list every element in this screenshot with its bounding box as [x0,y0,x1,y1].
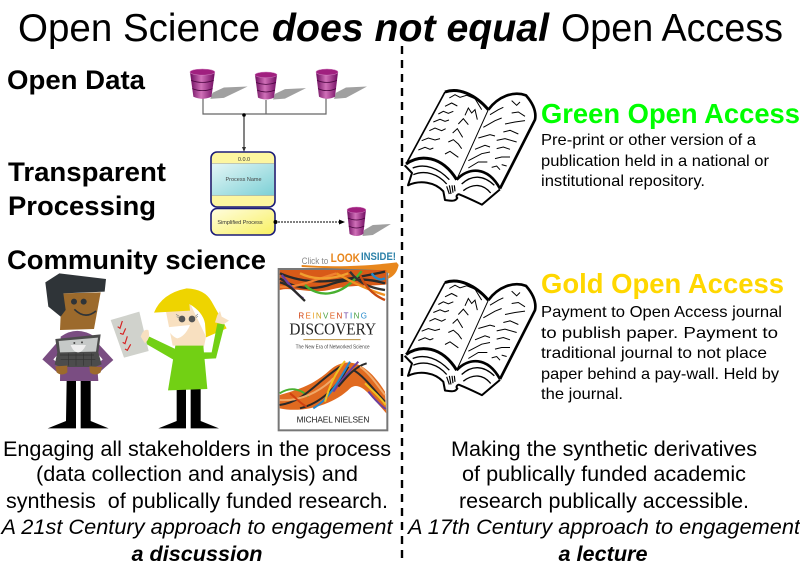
dotted arrow [274,220,345,224]
title: Open Access [561,7,783,50]
right caption: research publically accessible. [459,489,749,513]
look inside banner [302,251,399,279]
cover title: REINVENTING [298,312,367,321]
heading: open data: Open Data [7,65,146,95]
right caption: A 17th Century approach to engagement [406,515,800,539]
heading: transparent processing [8,157,166,221]
woman [111,288,229,428]
title [18,7,783,50]
connector lines [203,98,326,152]
left caption: (data collection and analysis) and [36,462,358,486]
illustration: two people [42,273,229,428]
look inside banner: INSIDE! [361,251,396,263]
process box: 0.0.0 [238,157,250,163]
book cover: Reinventing Discovery [279,251,399,430]
heading: transparent processing: Processing [8,191,156,221]
process box [211,152,275,207]
text: gold description: paper behind a pay-wall. Held by [541,366,779,383]
title: Open Science [18,7,260,50]
text: gold description: traditional journal to not place [541,345,767,362]
text: gold description: to publish paper. Payment to [541,325,778,342]
center divider [401,46,403,560]
text: green description: publication held in a national or [541,153,770,170]
process box: Process Name [225,177,262,183]
right caption: a lecture [558,542,648,566]
text: green description: Pre-print or other version of a [541,132,756,149]
text: green description [541,132,770,190]
cover author: MICHAEL NIELSEN [297,415,369,425]
output database icon [347,207,391,236]
heading: community science: Community science [7,245,266,275]
left caption: synthesis of publically funded research. [6,489,388,513]
text: gold description: the journal. [541,386,623,403]
text: gold description: Payment to Open Access journal [541,304,782,321]
left caption [0,437,394,566]
book cover: Reinventing Discovery: DISCOVERY [289,319,376,338]
database icons [190,69,367,100]
wire bundle top [280,270,386,301]
icon: open book gold [405,280,536,395]
icon: open book green [405,90,536,205]
look inside banner: LOOK [331,251,360,265]
book cover: Reinventing Discovery: The New Era of Networked Science [296,345,370,351]
cover [279,269,387,430]
left caption: A 21st Century approach to engagement [0,515,394,539]
man [42,273,113,428]
workflow diagram [190,69,391,236]
heading: transparent processing: Transparent [8,157,166,187]
left caption: a discussion [132,542,262,566]
look inside banner: Click to [302,256,328,266]
heading: gold open access: Gold Open Access [541,268,784,299]
text: green description: institutional repository. [541,173,705,190]
simplified process box [211,208,275,235]
right caption: Making the synthetic derivatives [451,437,757,461]
right caption: of publically funded academic [462,462,746,486]
title: does not equal [272,7,550,50]
left caption: Engaging all stakeholders in the process [3,437,391,461]
right caption [406,437,800,566]
heading: green open access: Green Open Access [541,98,800,129]
simplified process box: Simplified Process [217,220,263,226]
wire bundle twist [280,361,386,413]
text: gold description [541,304,782,403]
